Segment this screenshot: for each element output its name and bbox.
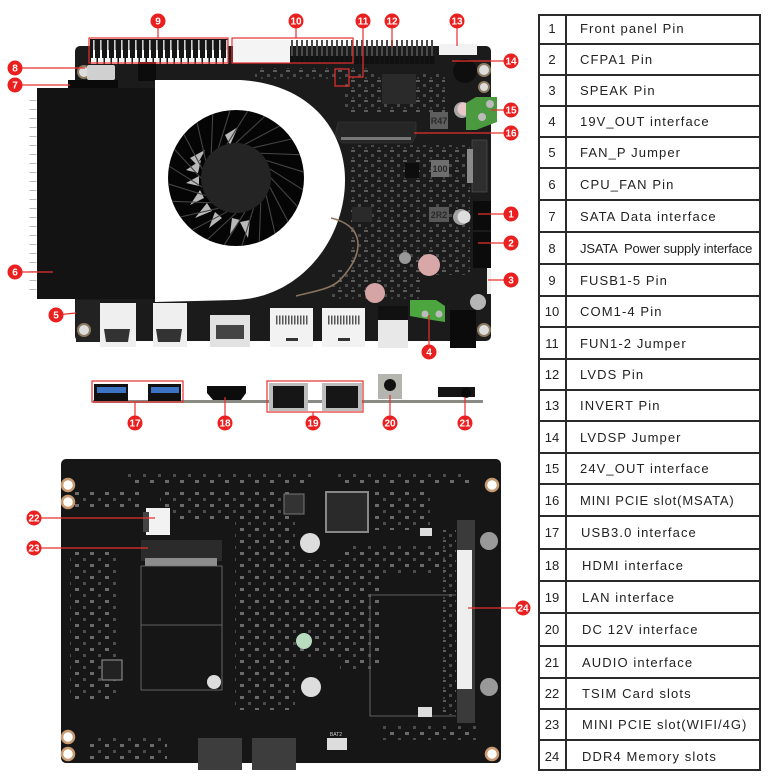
connector row FUSB bbox=[90, 39, 228, 64]
standoff bbox=[138, 62, 156, 81]
legend table: LVDSP Jumper bbox=[580, 430, 682, 444]
legend table: USB3.0 interface bbox=[581, 525, 697, 540]
PCB edge bbox=[93, 400, 483, 403]
heatsink fins bbox=[30, 100, 36, 290]
SATA data connector bbox=[68, 80, 118, 88]
green sticker bbox=[296, 633, 312, 649]
legend table: 20 bbox=[545, 622, 559, 637]
legend table: LVDS Pin bbox=[580, 367, 644, 382]
BAT2 connector bbox=[327, 738, 347, 750]
callout numbers: 1 bbox=[508, 210, 514, 220]
callout numbers: 20 bbox=[384, 418, 396, 430]
legend table: AUDIO interface bbox=[582, 654, 693, 670]
callout numbers: 3 bbox=[508, 276, 514, 286]
legend table: 21 bbox=[545, 654, 559, 670]
mounting holes bbox=[78, 64, 490, 336]
DDR4 slot bbox=[443, 520, 475, 723]
callout numbers: 17 bbox=[129, 418, 141, 430]
legend table: 16 bbox=[545, 492, 559, 508]
white fan shroud bbox=[155, 80, 345, 302]
legend table: 18 bbox=[545, 558, 559, 572]
inductors: 100 bbox=[432, 164, 448, 174]
legend table: 14 bbox=[545, 430, 559, 444]
connector row COM black part bbox=[290, 40, 353, 63]
lower-left chip bbox=[102, 660, 122, 680]
buzzer bbox=[453, 59, 477, 83]
INVERT connector bbox=[439, 44, 477, 55]
USB3.0 blue ports bbox=[94, 384, 181, 401]
legend table: 4 bbox=[548, 114, 556, 129]
callout numbers: 6 bbox=[12, 268, 18, 278]
right pin headers bbox=[473, 201, 491, 230]
capacitors bbox=[365, 102, 486, 310]
legend table: DC 12V interface bbox=[582, 622, 699, 637]
legend table: 3 bbox=[548, 83, 556, 98]
legend table: 1 bbox=[548, 21, 556, 36]
WIFI card outline bbox=[141, 566, 222, 690]
green terminal 24V bbox=[466, 97, 497, 130]
callout numbers: 14 bbox=[505, 56, 517, 68]
DC jack front bbox=[378, 374, 402, 399]
JSATA power connector bbox=[87, 65, 115, 80]
callout numbers bbox=[8, 14, 530, 616]
callout numbers: 13 bbox=[451, 16, 463, 28]
USB port 2 bbox=[153, 303, 187, 347]
DC port bbox=[378, 306, 408, 348]
legend table: 17 bbox=[545, 525, 559, 540]
LVDS pins bbox=[353, 40, 435, 64]
callout numbers: 19 bbox=[307, 418, 319, 430]
legend table: 7 bbox=[548, 208, 556, 224]
red highlight boxes and leader lines bbox=[15, 21, 523, 608]
callout numbers: 10 bbox=[290, 16, 302, 28]
second right pin header bbox=[473, 232, 491, 268]
legend table: 12 bbox=[545, 367, 559, 382]
connector row COM white part bbox=[233, 40, 290, 63]
callout numbers: 22 bbox=[28, 514, 40, 524]
callout numbers: 9 bbox=[155, 16, 161, 28]
HDMI front bbox=[207, 386, 246, 400]
legend table: 19V_OUT interface bbox=[580, 114, 710, 129]
legend table: SATA Data interface bbox=[580, 208, 717, 224]
front view of ports bbox=[93, 374, 483, 411]
legend table: 10 bbox=[545, 304, 559, 319]
legend table: INVERT Pin bbox=[580, 398, 661, 413]
PCB back bbox=[61, 459, 501, 763]
callout numbers: 2 bbox=[508, 238, 514, 250]
audio front bbox=[438, 387, 475, 398]
clips bbox=[418, 528, 432, 717]
top motherboard photo bbox=[33, 39, 497, 348]
legend table: 9 bbox=[548, 272, 556, 288]
board PCB bbox=[75, 46, 491, 341]
SIM card slot bbox=[143, 508, 170, 535]
legend table: 24 bbox=[545, 748, 559, 764]
inductors: 2R2 bbox=[431, 210, 447, 220]
legend table: 19 bbox=[545, 590, 559, 604]
legend table: SPEAK Pin bbox=[580, 83, 656, 98]
legend table: JSATA Power supply interface bbox=[580, 240, 752, 256]
legend table: CPU_FAN Pin bbox=[580, 176, 674, 192]
legend table: HDMI interface bbox=[582, 558, 684, 572]
legend table: FUN1-2 Jumper bbox=[580, 336, 687, 350]
speak connector bbox=[487, 268, 491, 294]
callout numbers: 24 bbox=[517, 604, 529, 614]
fan cable bbox=[296, 218, 358, 296]
LAN front bbox=[269, 383, 362, 411]
MINI PCIE slot bbox=[141, 540, 222, 566]
legend table: COM1-4 Pin bbox=[580, 304, 663, 319]
HDMI port bbox=[210, 315, 250, 347]
legend table: 6 bbox=[548, 176, 556, 192]
MSATA slot bbox=[335, 122, 416, 143]
LAN backs bbox=[198, 738, 296, 770]
legend table: 2 bbox=[548, 52, 556, 67]
callout numbers: 18 bbox=[219, 418, 231, 430]
legend table: MINI PCIE slot(MSATA) bbox=[580, 492, 735, 508]
audio jack bbox=[450, 310, 476, 348]
legend table: 23 bbox=[545, 717, 559, 732]
legend table: MINI PCIE slot(WIFI/4G) bbox=[582, 717, 747, 732]
BAT2 label: BAT2 bbox=[330, 732, 342, 738]
main chip bbox=[326, 492, 368, 532]
LAN port 2 bbox=[322, 308, 365, 347]
legend table: TSIM Card slots bbox=[582, 686, 692, 701]
callout numbers: 8 bbox=[12, 64, 18, 74]
fan bbox=[168, 110, 304, 246]
secondary chip bbox=[284, 494, 304, 514]
bottom motherboard photo bbox=[61, 459, 501, 770]
callout numbers: 23 bbox=[28, 544, 40, 554]
legend table: 11 bbox=[545, 336, 559, 350]
callout numbers: 5 bbox=[53, 310, 59, 322]
legend table: LAN interface bbox=[582, 590, 675, 604]
legend table: 8 bbox=[548, 240, 556, 256]
legend table: 5 bbox=[548, 145, 556, 160]
component clusters bbox=[70, 473, 480, 760]
component clusters bbox=[76, 68, 487, 342]
legend table: DDR4 Memory slots bbox=[582, 748, 717, 764]
inductors bbox=[429, 112, 449, 222]
inductors: R47 bbox=[431, 116, 447, 126]
standoffs bbox=[207, 532, 498, 697]
callout numbers: 21 bbox=[459, 418, 471, 430]
callout numbers: 11 bbox=[358, 16, 369, 28]
legend table: 15 bbox=[545, 461, 559, 476]
legend table: FUSB1-5 Pin bbox=[580, 272, 668, 288]
LAN port 1 bbox=[270, 308, 313, 347]
callout numbers: 16 bbox=[505, 128, 517, 140]
mounting holes bbox=[62, 479, 498, 760]
callout numbers: 4 bbox=[426, 348, 432, 358]
memory outline bbox=[370, 595, 456, 716]
green terminal 19V bbox=[410, 300, 445, 322]
legend table: 13 bbox=[545, 398, 559, 413]
legend table: 24V_OUT interface bbox=[580, 461, 710, 476]
black heatsink block bbox=[37, 88, 155, 299]
legend table bbox=[538, 14, 761, 771]
callout numbers: 12 bbox=[386, 16, 398, 28]
callout numbers: 7 bbox=[12, 80, 18, 92]
legend table: Front panel Pin bbox=[580, 21, 685, 36]
legend table: 22 bbox=[545, 686, 559, 701]
legend table: FAN_P Jumper bbox=[580, 145, 681, 160]
legend table: CFPA1 Pin bbox=[580, 52, 653, 67]
callout numbers: 15 bbox=[505, 106, 517, 116]
USB port 1 bbox=[100, 303, 136, 347]
